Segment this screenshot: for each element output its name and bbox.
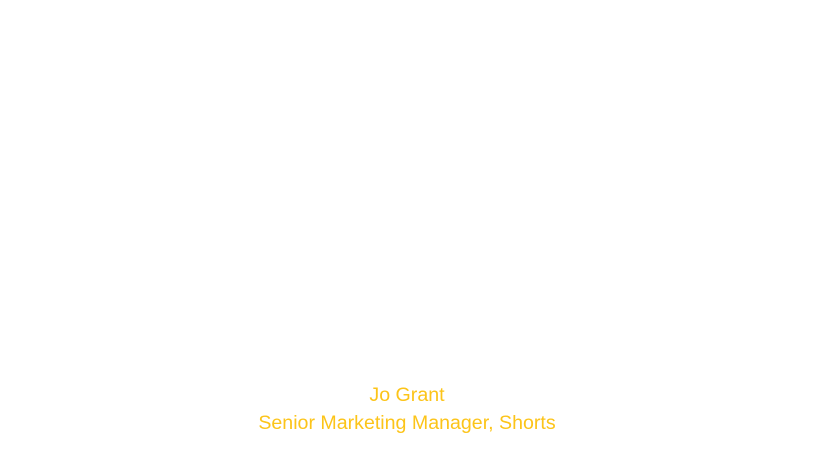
text: attribution title: Senior Marketing Manager, Shorts bbox=[258, 412, 556, 434]
text: attribution name: Jo Grant bbox=[369, 384, 445, 406]
